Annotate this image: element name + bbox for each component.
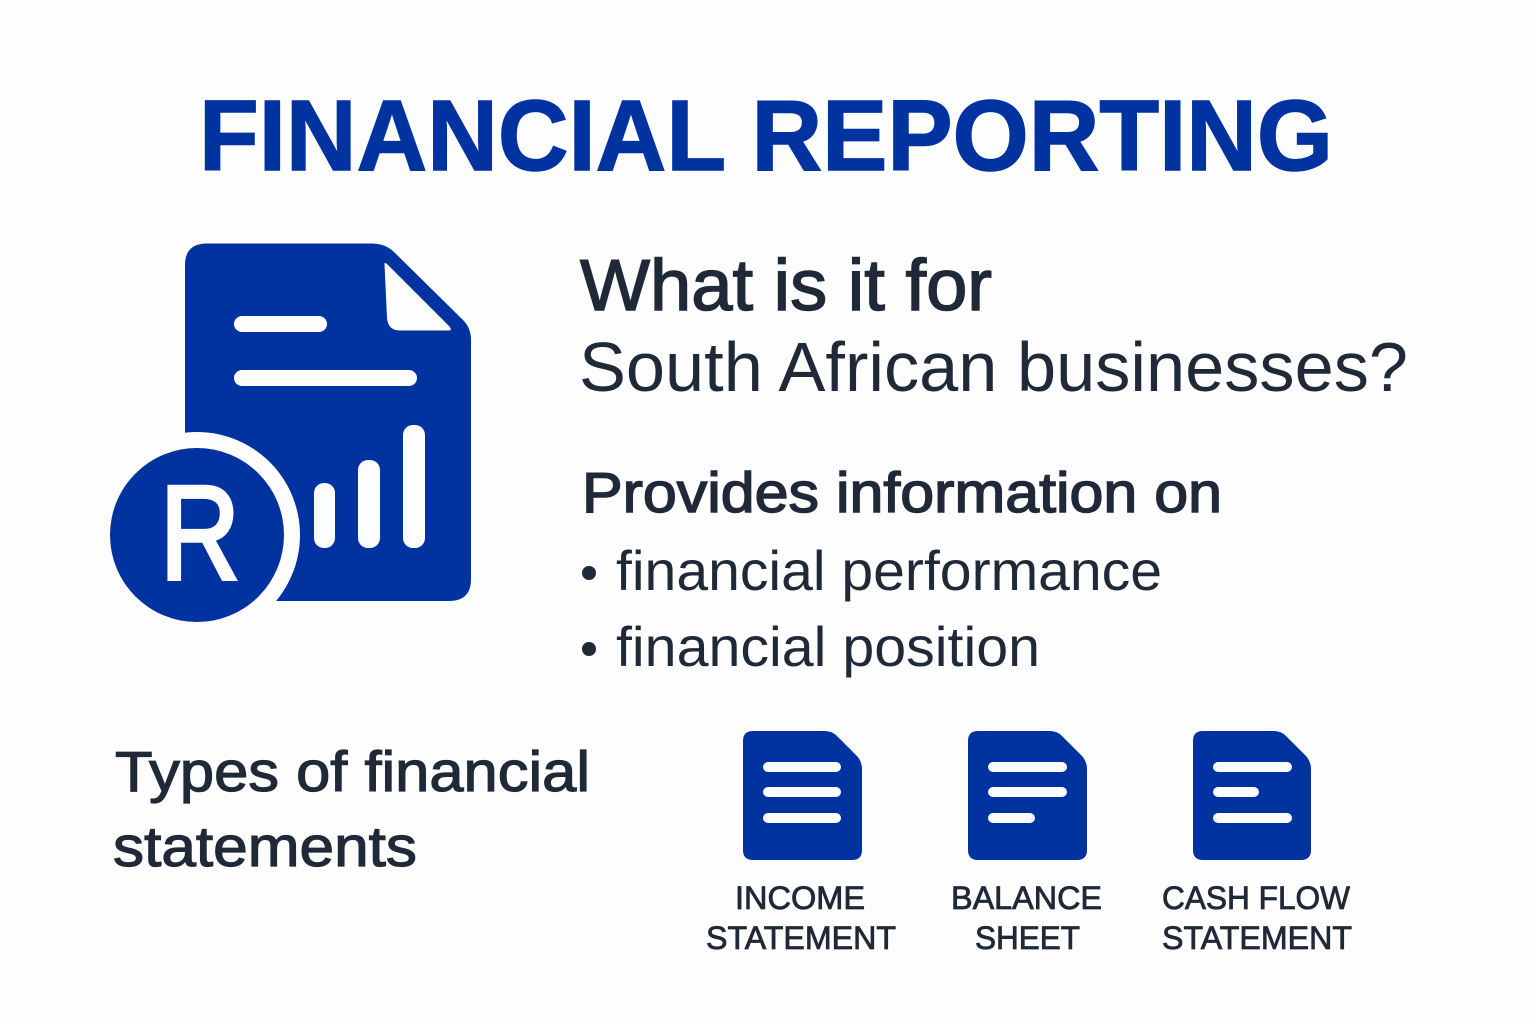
label: balance sheet xyxy=(951,880,1102,956)
heading: types of financial statements: statements xyxy=(113,815,417,879)
icon: financial report document with rand coin xyxy=(94,244,471,638)
icon: income statement document xyxy=(743,731,862,860)
bullet list: financial position xyxy=(616,615,1040,678)
label: income statement xyxy=(706,880,896,956)
bullet list xyxy=(582,539,1162,678)
label: balance sheet: BALANCE xyxy=(951,880,1102,916)
icon: balance sheet document xyxy=(968,731,1087,860)
icon: financial report document with rand coin: R xyxy=(160,459,240,608)
bullet list: financial performance xyxy=(616,539,1162,602)
subheading: South African businesses: South African businesses? xyxy=(579,328,1408,406)
heading: provides information on: Provides information on xyxy=(582,461,1222,525)
label: cash flow statement xyxy=(1162,880,1352,956)
label: cash flow statement: STATEMENT xyxy=(1162,920,1352,956)
heading: types of financial statements: Types of financial xyxy=(115,740,590,804)
heading: types of financial statements xyxy=(113,740,590,879)
label: income statement: STATEMENT xyxy=(706,920,896,956)
label: income statement: INCOME xyxy=(735,880,865,916)
title: FINANCIAL REPORTING xyxy=(199,80,1333,192)
icon: cash flow statement document xyxy=(1193,731,1311,860)
heading: what is it for: What is it for xyxy=(580,246,992,326)
label: cash flow statement: CASH FLOW xyxy=(1162,880,1351,916)
label: balance sheet: SHEET xyxy=(975,920,1080,956)
